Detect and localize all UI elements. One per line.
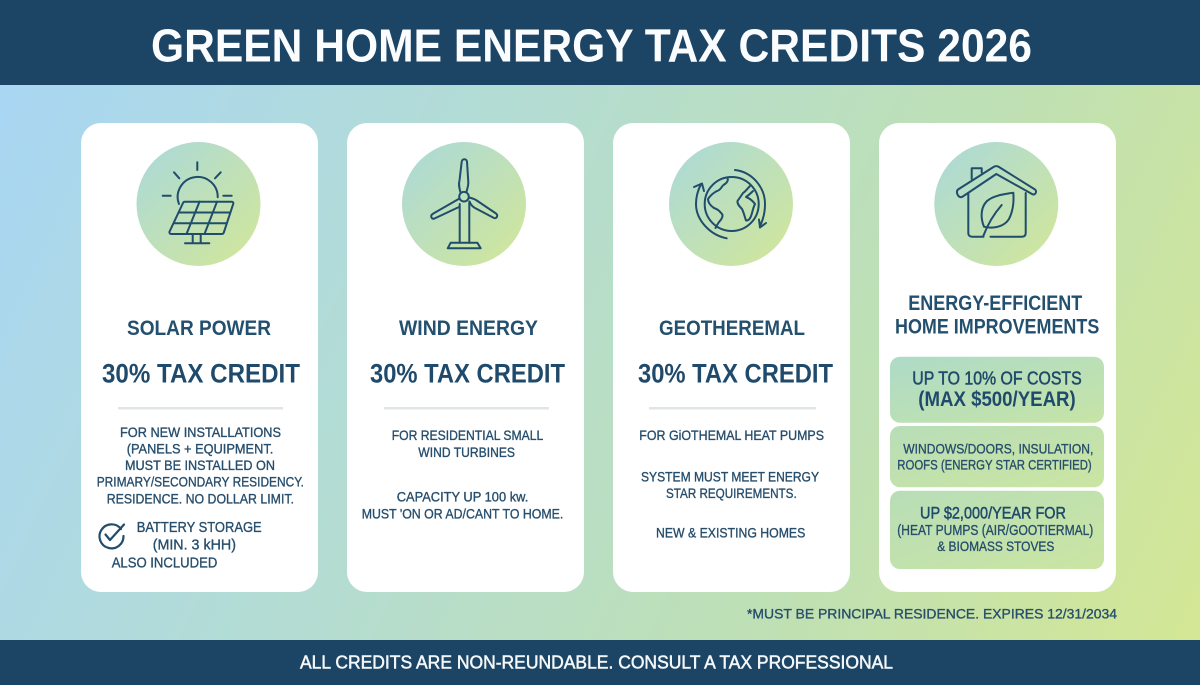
solar details: MUST BE INSTALLED ON <box>125 457 275 473</box>
icon: check mark <box>100 524 124 548</box>
solar details: PRIMARY/SECONDARY RESIDENCY. <box>97 474 304 490</box>
title banner <box>0 0 1200 85</box>
panel: solar power <box>81 123 318 592</box>
geothermal details: FOR GiOTHEMAL HEAT PUMPS <box>639 427 824 443</box>
geothermal details: SYSTEM MUST MEET ENERGY <box>641 468 820 484</box>
icon: wind turbine <box>431 159 497 248</box>
geothermal details <box>639 427 824 541</box>
heading: geothermal: GEOTHEREMAL <box>659 317 805 340</box>
solar details <box>97 424 304 506</box>
box: heat pumps: UP $2,000/YEAR FOR <box>920 503 1066 522</box>
credit amount: 30% TAX CREDIT <box>102 359 300 389</box>
battery storage note: ALSO INCLUDED <box>112 554 217 571</box>
wind details: FOR RESIDENTIAL SMALL <box>392 427 543 443</box>
wind details: WIND TURBINES <box>418 444 515 460</box>
icon: globe with arrows <box>694 170 766 238</box>
wind details <box>362 427 563 521</box>
box: windows and doors <box>890 426 1104 487</box>
box: up to 10 percent: (MAX $500/YEAR) <box>918 388 1076 411</box>
box: windows and doors: ROOFS (ENERGY STAR CERTIFIED) <box>897 456 1092 472</box>
wind details: MUST 'ON OR AD/CANT TO HOME. <box>362 505 563 521</box>
box: heat pumps: & BIOMASS STOVES <box>937 538 1054 554</box>
solar details: FOR NEW INSTALLATIONS <box>120 424 281 440</box>
footer banner <box>0 640 1200 685</box>
wind details: CAPACITY UP 100 kw. <box>397 488 528 504</box>
box: heat pumps <box>890 491 1104 569</box>
heading: energy-efficient home improvements: ENERGY-EFFICIENT <box>908 292 1082 315</box>
solar details: RESIDENCE. NO DOLLAR LIMIT. <box>107 490 294 506</box>
box: heat pumps: (HEAT PUMPS (AIR/GOOTIERMAL) <box>897 522 1093 539</box>
box: windows and doors: WINDOWS/DOORS, INSULATION, <box>903 440 1093 456</box>
panel: geothermal <box>613 123 850 592</box>
heading: wind energy: WIND ENERGY <box>399 317 538 340</box>
heading: energy-efficient home improvements <box>895 292 1099 338</box>
credit amount: 30% TAX CREDIT <box>638 359 833 389</box>
icon: solar panel and sun <box>163 162 233 243</box>
credit amount: 30% TAX CREDIT <box>370 359 565 389</box>
box: up to 10 percent <box>890 357 1104 423</box>
geothermal details: NEW & EXISTING HOMES <box>656 525 805 541</box>
footnote: *MUST BE PRINCIPAL RESIDENCE. EXPIRES 12/31/2034 <box>747 605 1117 621</box>
panel: home improvements <box>879 123 1116 592</box>
battery storage note: (MIN. 3 kHH) <box>153 536 236 553</box>
box: up to 10 percent: UP TO 10% OF COSTS <box>912 368 1082 388</box>
heading: solar power: SOLAR POWER <box>127 317 271 340</box>
panel: wind energy <box>347 123 584 592</box>
heading: energy-efficient home improvements: HOME IMPROVEMENTS <box>895 315 1099 338</box>
solar details: (PANELS + EQUIPMENT. <box>127 441 273 457</box>
footer banner: ALL CREDITS ARE NON-REUNDABLE. CONSULT A TAX PROFESSIONAL <box>300 652 893 672</box>
geothermal details: STAR REQUIREMENTS. <box>666 485 797 501</box>
icon: house with leaf <box>957 166 1036 237</box>
battery storage note: BATTERY STORAGE <box>137 519 262 536</box>
title banner: GREEN HOME ENERGY TAX CREDITS 2026 <box>151 20 1032 72</box>
battery storage note <box>112 519 262 571</box>
